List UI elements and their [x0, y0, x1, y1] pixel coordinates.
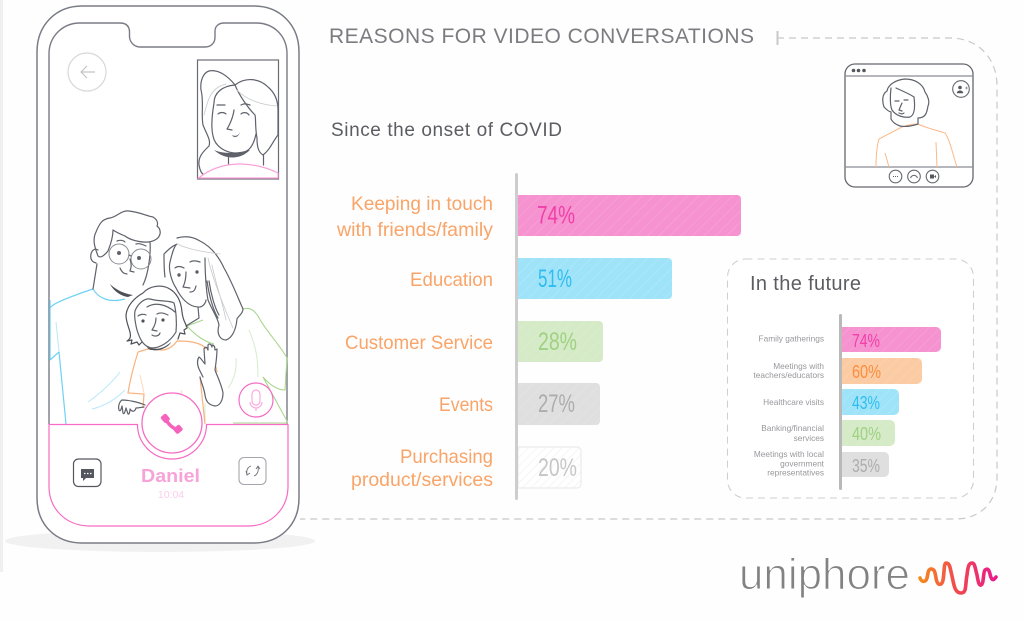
bar teachers 60%	[842, 358, 922, 384]
person in window	[876, 79, 957, 167]
inset portrait	[198, 60, 278, 179]
call time: 10:04	[158, 489, 184, 501]
bar family 74%	[842, 327, 941, 352]
bar 51%	[518, 258, 672, 299]
bar healthcare 43%	[842, 389, 899, 415]
bar banking 40%: 40%	[852, 423, 881, 444]
bar 28%	[518, 321, 603, 362]
mic button	[239, 383, 273, 417]
chat icon	[74, 459, 101, 486]
man figure	[50, 211, 160, 424]
bar 74%	[518, 195, 741, 236]
panel labels: Healthcare visits	[763, 397, 824, 407]
bar 27%: 27%	[538, 390, 575, 418]
panel labels: Family gatherings	[759, 334, 824, 344]
category labels: Customer Service	[345, 332, 493, 354]
category labels: Education	[410, 269, 493, 291]
bar 28%: 28%	[538, 328, 577, 356]
phone body	[37, 6, 299, 543]
panel axis	[839, 314, 842, 490]
category labels: Keeping in touch	[351, 193, 493, 215]
bar banking 40%	[842, 420, 895, 446]
panel labels: teachers/educators	[753, 370, 824, 380]
back button	[68, 53, 106, 91]
title: REASONS FOR VIDEO CONVERSATIONS	[329, 25, 754, 48]
category labels: Purchasing	[400, 446, 493, 468]
bar 74%: 74%	[537, 202, 575, 230]
panel labels: Meetings with local	[754, 449, 824, 459]
bar family 74%: 74%	[852, 330, 880, 351]
panel labels: Banking/financial	[761, 423, 824, 433]
bar healthcare 43%: 43%	[852, 392, 880, 413]
bar government 35%	[842, 452, 889, 477]
bar 27%	[518, 383, 600, 425]
panel labels: Meetings with	[773, 361, 824, 371]
phone screen with notch	[49, 23, 287, 424]
panel labels: representatives	[767, 468, 824, 478]
call control buttons	[889, 170, 939, 183]
category labels	[336, 193, 493, 491]
panel labels	[753, 334, 825, 478]
panel labels: government	[780, 458, 825, 468]
panel: in the future	[728, 259, 974, 498]
woman figure	[164, 237, 287, 424]
switch camera icon	[239, 458, 266, 484]
phone shadow	[5, 530, 315, 552]
pink control panel	[49, 424, 288, 526]
subtitle: since COVID: Since the onset of COVID	[331, 120, 562, 141]
bar 20%	[518, 447, 581, 488]
category labels: Events	[439, 394, 493, 416]
category labels: product/services	[351, 469, 493, 491]
child figure	[119, 286, 223, 424]
bar 51%: 51%	[538, 265, 572, 293]
logo: uniphore	[739, 550, 910, 599]
logo	[739, 550, 996, 599]
category labels: with friends/family	[336, 219, 493, 241]
video call window icon	[845, 64, 973, 187]
bar teachers 60%: 60%	[852, 361, 881, 382]
bar chart: since COVID	[336, 173, 741, 500]
caller name: Daniel	[141, 466, 200, 486]
dashed frame connecting title and panels	[300, 31, 997, 519]
bar government 35%: 35%	[852, 455, 880, 476]
panel labels: services	[794, 433, 824, 443]
add-person button	[953, 81, 969, 97]
panel heading: In the future	[750, 273, 861, 295]
logo wave	[920, 563, 996, 593]
axis	[515, 173, 518, 500]
phone illustration	[37, 6, 299, 543]
bar 20%: 20%	[538, 454, 577, 482]
call button	[142, 393, 202, 453]
